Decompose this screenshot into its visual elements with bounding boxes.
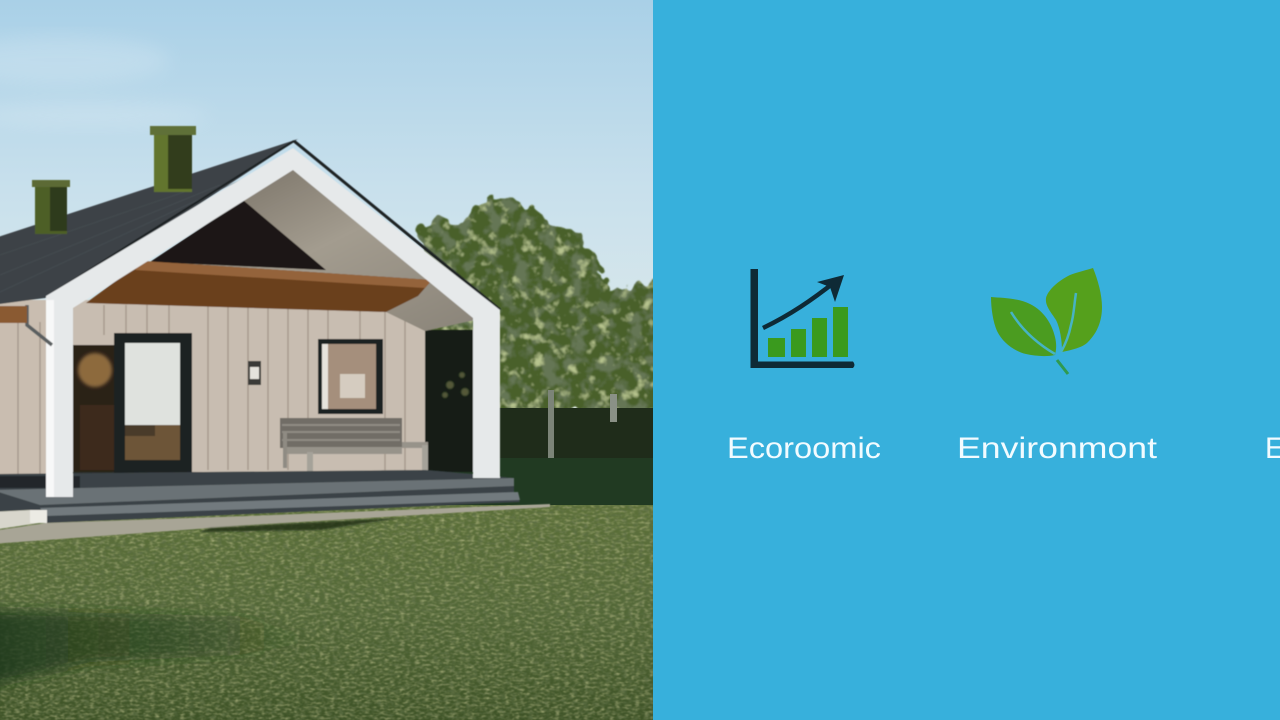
roof dark edge: [48, 141, 294, 296]
roof: [0, 139, 298, 305]
window: [318, 339, 383, 414]
soffit: [150, 168, 480, 331]
wood beam: [86, 261, 432, 312]
gutter: [27, 305, 52, 345]
photo panel: house scene: [0, 0, 660, 720]
left wall: [0, 300, 50, 480]
back lawn: [420, 458, 653, 508]
door: [73, 333, 192, 473]
clouds: [0, 36, 210, 127]
wall lamp: [248, 361, 261, 385]
front lawn: [0, 505, 653, 720]
icon: economic growth chart: [750, 269, 854, 368]
chimney: front: [150, 126, 196, 192]
porch opening dark right: [425, 330, 475, 472]
trees: [418, 197, 660, 415]
ground base: [0, 415, 653, 545]
deck and steps: [0, 470, 520, 530]
chimney: rear: [32, 180, 70, 234]
label: economic: Ecoroomic: [727, 432, 881, 465]
label: environment: Environmont: [957, 432, 1157, 465]
path: [0, 504, 550, 544]
bench: [280, 418, 428, 477]
blue panel: [653, 0, 1280, 720]
porch back wall: [73, 300, 427, 472]
sky: [0, 0, 653, 420]
icon: green leaves: [991, 268, 1102, 374]
dark gable: [150, 200, 326, 270]
house: [0, 126, 550, 544]
hedge and fence: [425, 408, 653, 463]
white gable frame: [46, 148, 500, 497]
wall battens: [18, 305, 405, 475]
